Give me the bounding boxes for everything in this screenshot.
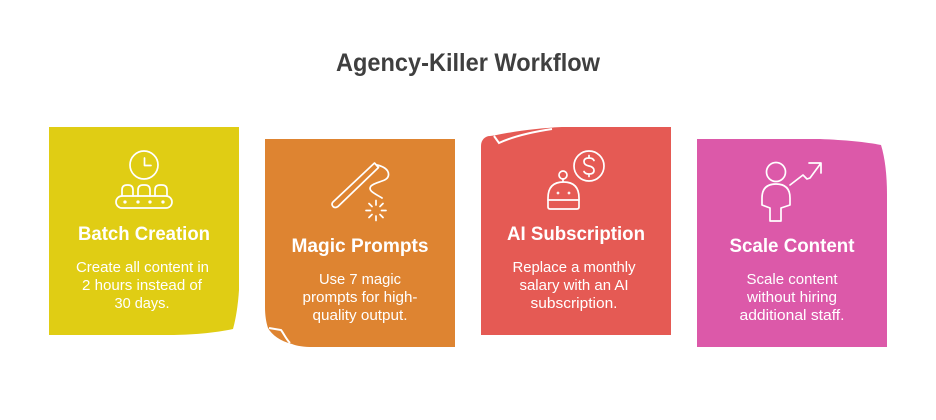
description — [76, 259, 209, 312]
heading: Batch Creation — [78, 223, 210, 245]
description: 2 hours instead of — [82, 277, 203, 294]
description: subscription. — [530, 295, 618, 312]
panel: ai subscription — [481, 127, 671, 335]
description: without hiring — [746, 289, 837, 306]
description: Create all content in — [76, 259, 209, 276]
panel: scale content — [697, 139, 887, 347]
heading: Magic Prompts — [292, 235, 429, 257]
card background — [49, 127, 239, 335]
description: Scale content — [746, 271, 838, 288]
description — [512, 259, 636, 312]
description: Use 7 magic — [319, 271, 401, 288]
icon: clock over conveyor belt — [116, 151, 172, 208]
description — [302, 271, 418, 324]
title: Agency-Killer Workflow — [336, 49, 601, 77]
panel: magic prompts — [265, 139, 455, 347]
description: quality output. — [312, 307, 408, 324]
description: prompts for high- — [302, 289, 418, 306]
icon: magic wand with sparkle — [332, 163, 389, 220]
heading: AI Subscription — [507, 223, 645, 245]
panel: batch creation — [49, 127, 239, 335]
card background — [697, 139, 887, 347]
description: 30 days. — [114, 295, 170, 312]
description — [740, 271, 844, 324]
icon: robot with dollar coin — [548, 151, 604, 209]
description: Replace a monthly — [512, 259, 636, 276]
card background — [481, 127, 671, 335]
icon: person with rising arrow — [762, 162, 821, 221]
card background — [265, 139, 455, 347]
page fold — [494, 129, 552, 143]
heading: Scale Content — [730, 235, 855, 257]
page fold — [269, 328, 290, 343]
description: additional staff. — [740, 307, 844, 324]
description: salary with an AI — [520, 277, 628, 294]
